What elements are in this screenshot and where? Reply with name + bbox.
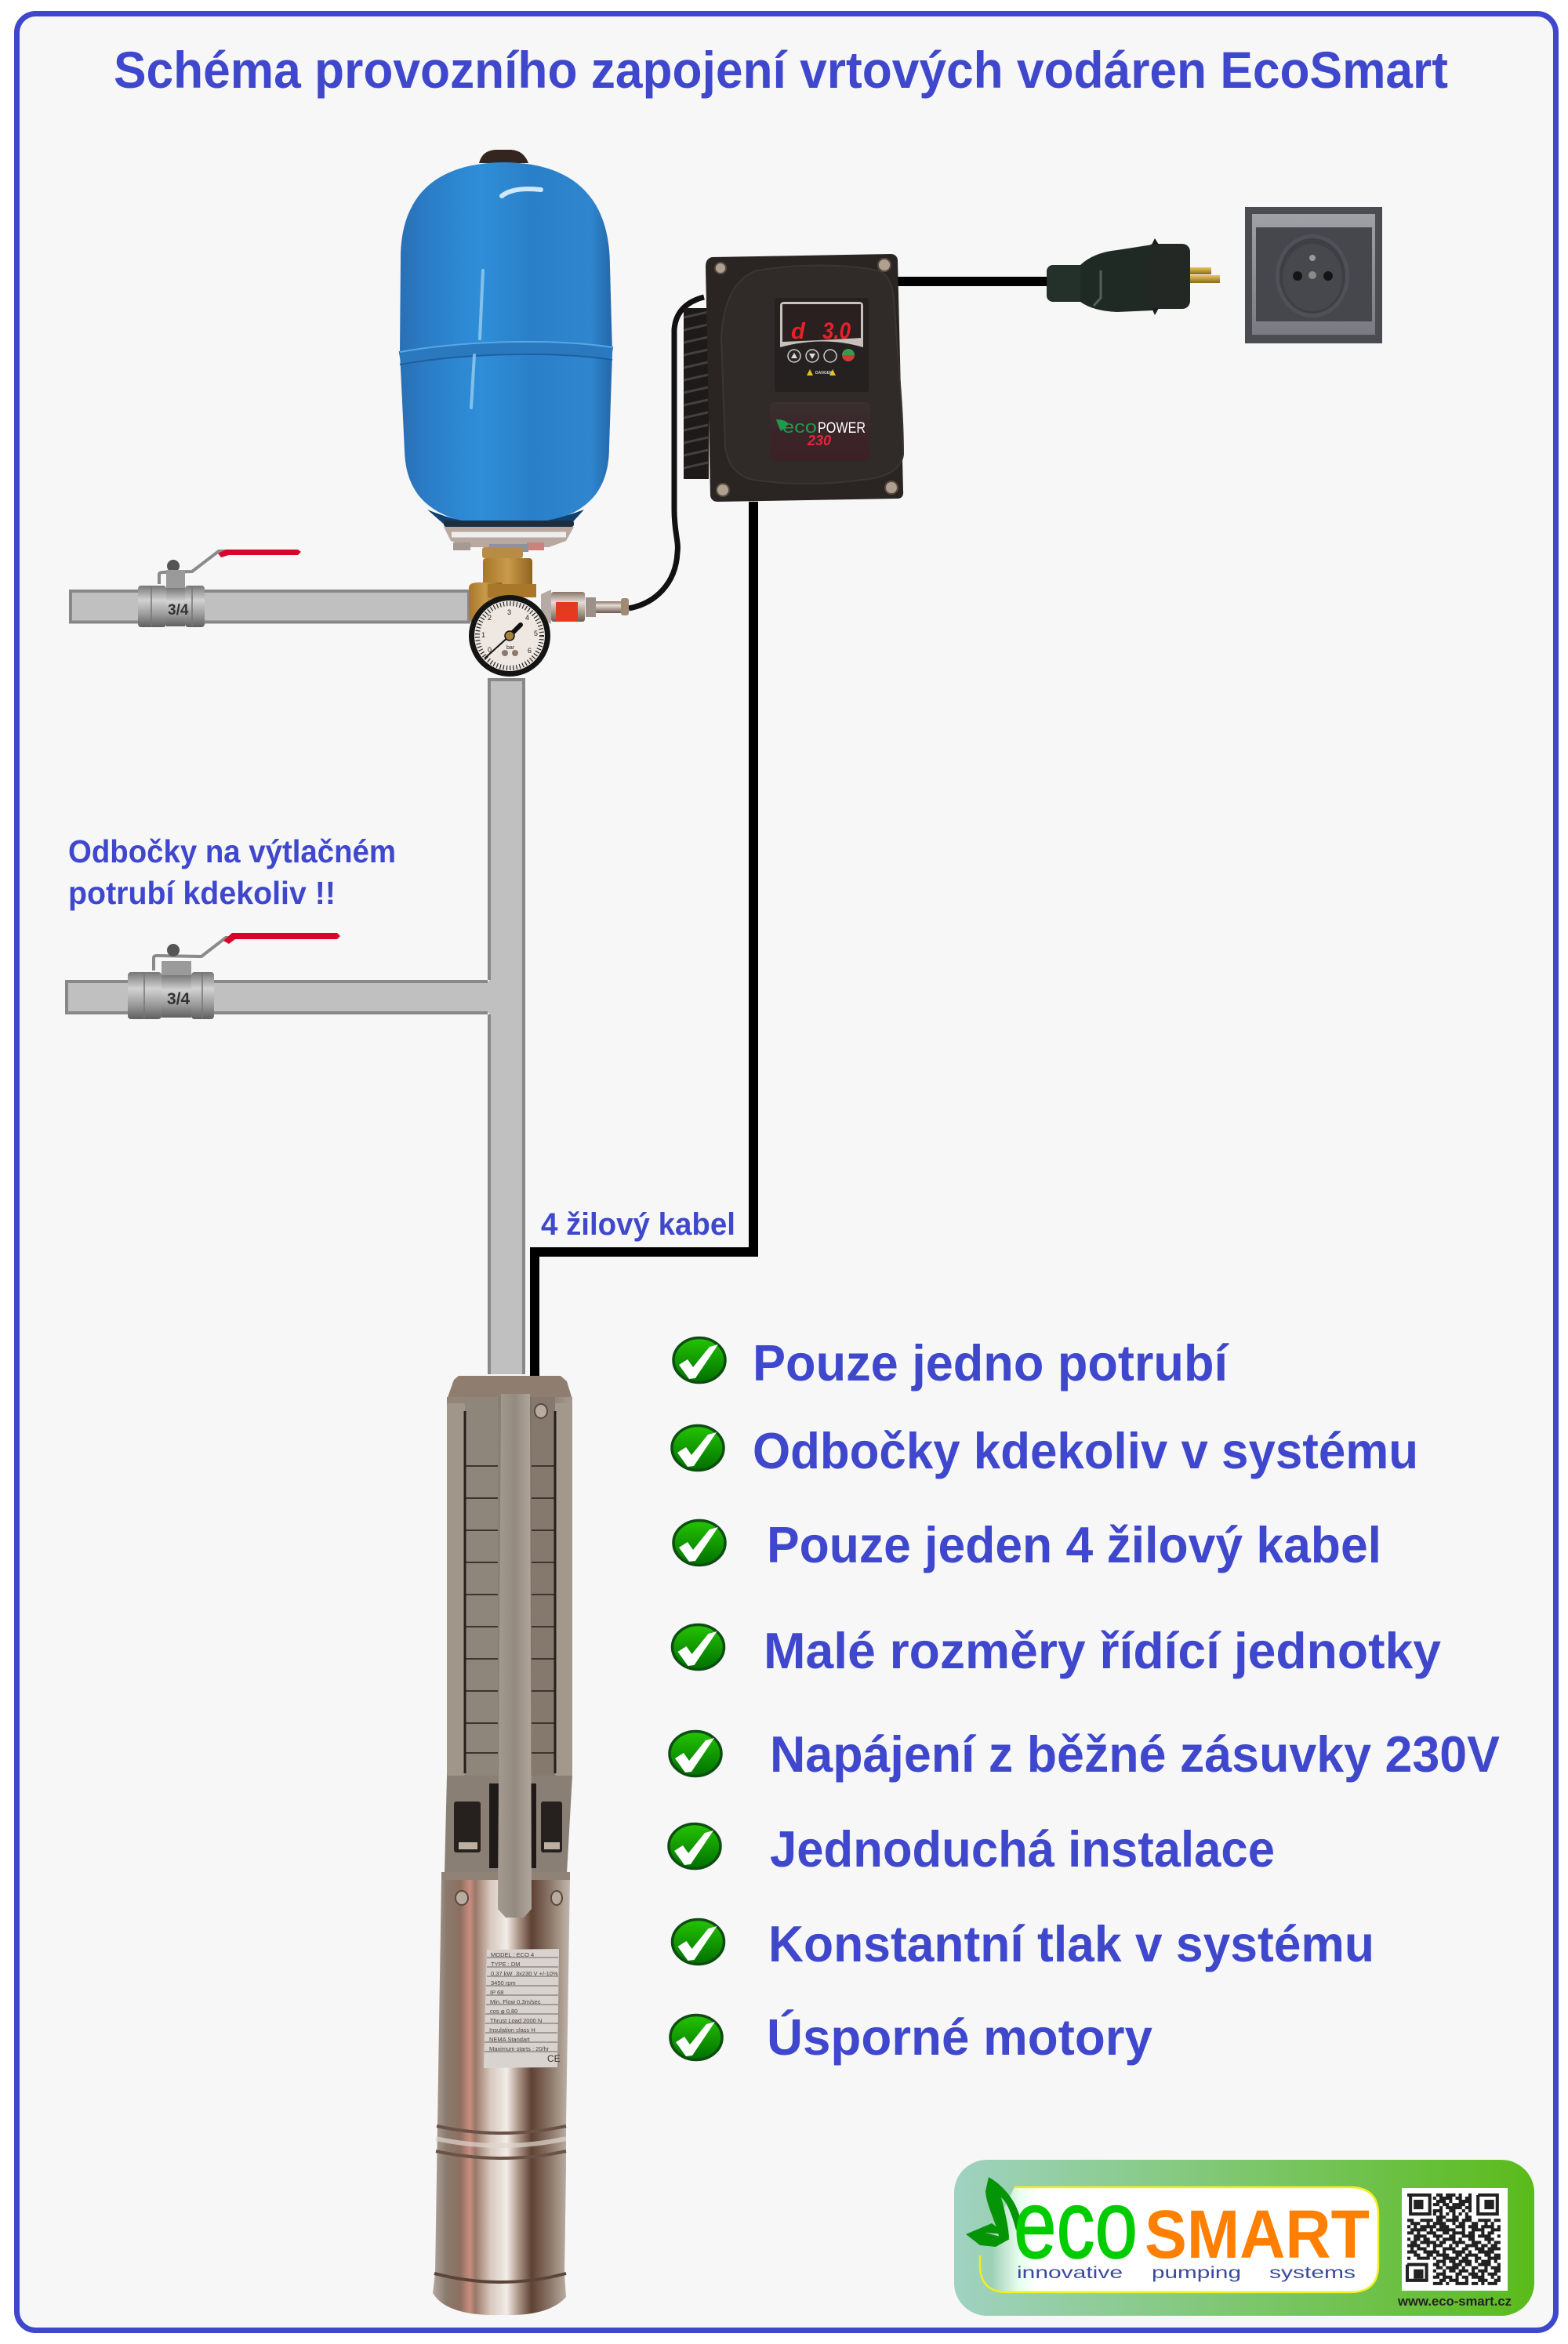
feature list [669, 1334, 1500, 2066]
display [780, 302, 863, 347]
display: d [791, 319, 806, 344]
label: branches [68, 833, 396, 911]
tagline: pumping [1152, 2264, 1241, 2282]
rating plate: IP 68 [490, 1989, 503, 1996]
ecoPOWER badge: eco [782, 417, 817, 437]
website: www.eco-smart.cz [1397, 2294, 1512, 2309]
tank flange [444, 521, 574, 552]
heat sink [684, 308, 709, 479]
ball valve: lower [128, 933, 340, 1019]
tagline: innovative [1017, 2264, 1123, 2282]
warning [807, 369, 836, 376]
item: power supply: Napájení z běžné zásuvky 230V [770, 1725, 1500, 1783]
power cable to pump [535, 502, 753, 1384]
QR code [1402, 2188, 1508, 2291]
ecoPOWER badge: POWER [818, 420, 866, 437]
label: cable: 4 žilový kabel [541, 1207, 735, 1242]
pressure tank [400, 150, 612, 527]
motor screws [456, 1404, 562, 1905]
rating plate: CE [547, 2053, 561, 2064]
item: constant pressure: Konstantní tlak v systému [768, 1915, 1374, 1972]
label: branches: potrubí kdekoliv !! [68, 875, 336, 911]
pressure gauge: 0 [488, 646, 492, 654]
pressure gauge: 4 [525, 614, 529, 622]
item: branches anywhere: Odbočky kdekoliv v systému [753, 1422, 1418, 1479]
rating plate: Maximum starts : 20/hr [489, 2045, 550, 2052]
motor body [433, 1878, 570, 2315]
logo white plate [980, 2187, 1378, 2292]
screws [715, 259, 898, 496]
label: branches: Odbočky na výtlačném [68, 833, 396, 869]
submersible pump [433, 1376, 572, 2315]
pump head [447, 1376, 572, 1776]
pressure gauge: 2 [488, 614, 492, 622]
eco: eco [1014, 2172, 1138, 2279]
power cord [893, 277, 1059, 286]
rating plate: Thrust Load 2000 N [490, 2017, 542, 2024]
rating plate: cos φ 0,80 [490, 2008, 517, 2015]
mounting plate [706, 254, 903, 502]
ecoPOWER badge: 230 [807, 433, 831, 448]
rating plate: Min. Flow 0,3m/sec [490, 1998, 541, 2005]
upper horizontal pipe [71, 591, 469, 622]
rating plate: Insulation class H [489, 2027, 535, 2034]
pressure transducer [541, 590, 629, 624]
rating plate [484, 1949, 561, 2068]
item: one pipe: Pouze jedno potrubí [753, 1334, 1229, 1392]
wall socket [1245, 207, 1382, 343]
pressure gauge: bar [506, 645, 515, 651]
ball valve: top [138, 550, 301, 627]
ecoPOWER badge [770, 402, 870, 461]
SMART: SMART [1145, 2197, 1370, 2273]
title: Schéma provozního zapojení vrtových vodáren EcoSmart [114, 41, 1448, 99]
pressure gauge [469, 595, 550, 677]
rating plate: TYPE : DM [491, 1961, 521, 1968]
rating plate: 3x230 V +/-10% [516, 1970, 558, 1977]
intake section [445, 1776, 572, 1874]
pressure gauge: 1 [481, 631, 485, 639]
pressure gauge: 6 [528, 647, 532, 655]
leaves [966, 2177, 1021, 2247]
warning: DANGER [815, 371, 833, 376]
vertical pipe with lower branch [67, 680, 524, 1374]
pressure gauge: 5 [534, 630, 538, 637]
ball valve: top: 3/4 [168, 602, 189, 619]
ball valve: lower: 3/4 [167, 990, 191, 1008]
item: efficient motors: Úsporné motory [767, 2008, 1152, 2066]
brass fitting [469, 547, 536, 622]
housing [721, 265, 903, 484]
center strap [498, 1394, 532, 1918]
motor rings [434, 2126, 566, 2282]
tagline [1017, 2264, 1356, 2282]
item: one cable: Pouze jeden 4 žilový kabel [767, 1516, 1381, 1573]
sensor cable [629, 297, 704, 608]
buttons [788, 349, 855, 362]
tagline: systems [1269, 2264, 1356, 2282]
keypad panel [775, 298, 869, 392]
item: easy installation: Jednoduchá instalace [770, 1820, 1275, 1878]
display: 3.0 [822, 318, 851, 344]
item: small control unit: Malé rozměry řídící jednotky [764, 1622, 1441, 1679]
rating plate: 0,37 kW [491, 1970, 513, 1977]
rating plate: MODEL : ECO 4 [491, 1951, 534, 1958]
EcoSmart logo panel [954, 2160, 1534, 2316]
rating plate: 3450 rpm [491, 1979, 516, 1987]
control unit [684, 254, 903, 502]
plug [1047, 238, 1220, 315]
rating plate: NEMA Standart [489, 2036, 531, 2043]
pressure gauge: 3 [507, 608, 511, 616]
